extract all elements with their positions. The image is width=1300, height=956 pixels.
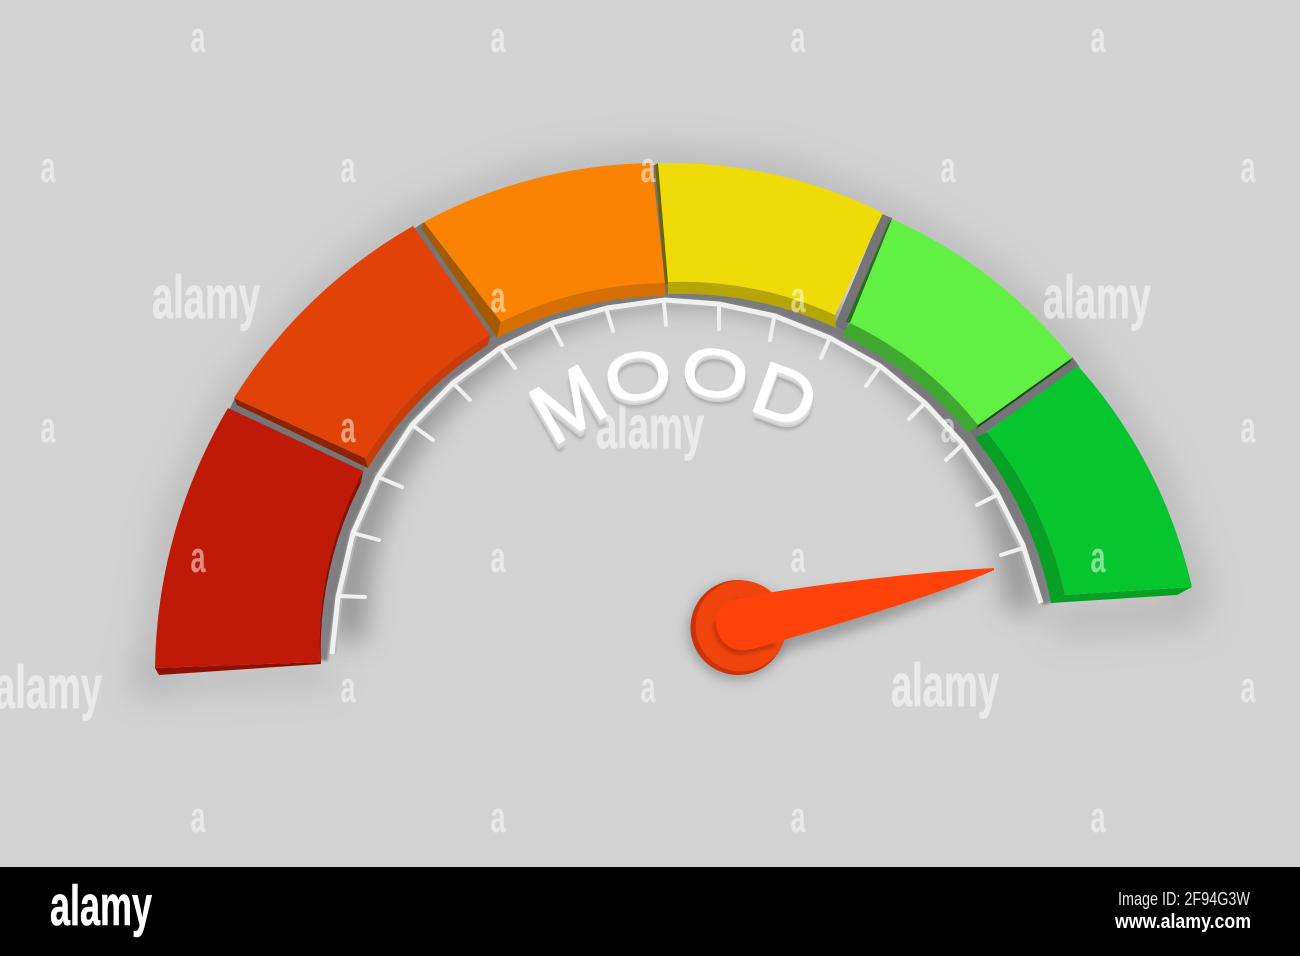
watermark tiles: a [490, 533, 506, 582]
segment: red-orange [234, 226, 490, 468]
watermark tiles: a [790, 533, 806, 582]
watermark tiles: a [1240, 403, 1256, 452]
watermark logos: alamy [891, 652, 999, 719]
watermark tiles: a [1090, 533, 1106, 582]
watermark tiles: a [1240, 143, 1256, 192]
watermark tiles: a [790, 273, 806, 322]
watermark tiles: a [640, 663, 656, 712]
letter O second: O [676, 331, 754, 415]
needle [688, 568, 994, 680]
watermark tiles: a [340, 663, 356, 712]
watermark tiles: a [1090, 13, 1106, 62]
segment: light green [842, 219, 1072, 433]
watermark tiles: a [190, 533, 206, 582]
watermark tiles: a [40, 403, 56, 452]
watermark tiles: a [190, 793, 206, 842]
website: www.alamy.com [1114, 911, 1251, 933]
segment: red [155, 408, 363, 675]
footer bar [0, 867, 1300, 956]
watermark tiles: a [190, 13, 206, 62]
watermark tiles: a [340, 143, 356, 192]
watermark logos: alamy [1043, 264, 1151, 331]
letter O: O [599, 334, 677, 418]
watermark tiles: a [1240, 663, 1256, 712]
watermark tiles: a [40, 143, 56, 192]
watermark tiles: a [790, 13, 806, 62]
watermark tiles: a [490, 13, 506, 62]
image id: Image ID: 2F94G3W [1118, 889, 1250, 909]
background shadows [140, 163, 1192, 690]
word MOOD [515, 331, 829, 462]
watermark tiles: a [340, 403, 356, 452]
segment: orange [421, 163, 665, 338]
letter M: M [515, 346, 621, 462]
watermark tiles: a [640, 143, 656, 192]
segment: green [975, 366, 1192, 603]
watermark logos: alamy [596, 394, 704, 461]
watermark tiles: a [940, 403, 956, 452]
watermark tiles: a [940, 143, 956, 192]
segment: yellow [655, 163, 883, 328]
watermark tiles: a [1090, 793, 1106, 842]
watermark tiles: a [490, 273, 506, 322]
watermark tiles: a [790, 793, 806, 842]
letter D: D [741, 345, 829, 445]
watermark logos [0, 264, 1151, 721]
gauge scale arc and ticks [320, 291, 1050, 660]
watermark tiles: a [490, 793, 506, 842]
gaps between segments [232, 165, 1076, 466]
watermark logos: alamy [152, 264, 260, 331]
footer logo: alamy [50, 874, 152, 938]
